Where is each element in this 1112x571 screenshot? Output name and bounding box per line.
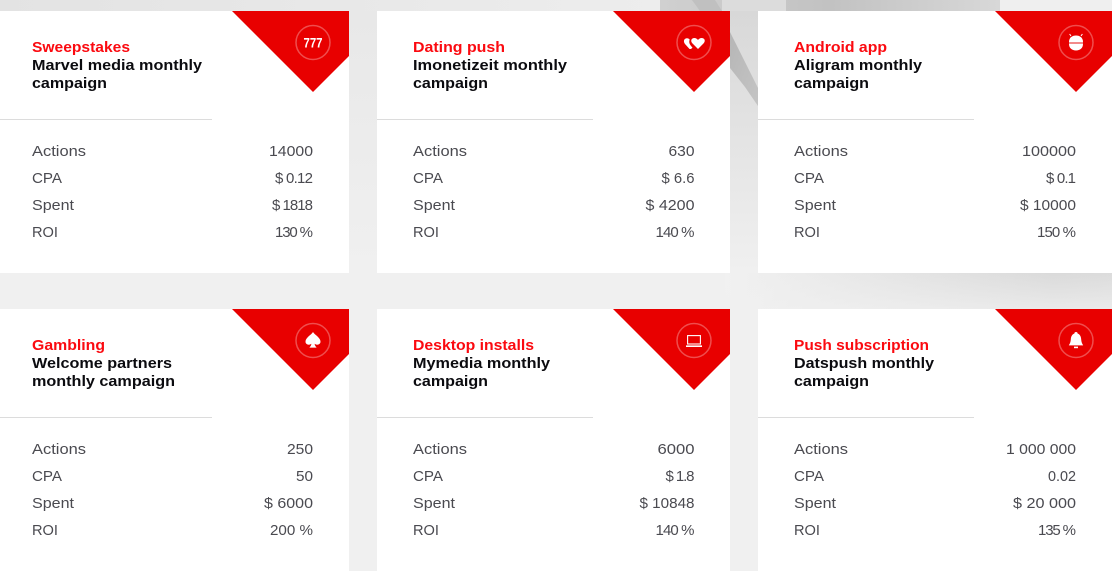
card: Push subscription <box>758 309 1112 571</box>
stats table: Spent <box>794 197 837 214</box>
stats table: $ 1818 <box>272 197 313 214</box>
stats table: ROI <box>32 522 58 539</box>
card: Dating push <box>377 11 730 273</box>
stats table: ROI <box>32 224 58 241</box>
heading: Sweepstakes <box>32 39 130 56</box>
stats table: Spent <box>32 495 75 512</box>
heading: Aligram monthly <box>794 57 923 74</box>
stats table: 250 <box>287 441 313 458</box>
heading: Android app <box>794 39 887 56</box>
heading: campaign <box>794 373 869 390</box>
stats table <box>794 143 1076 241</box>
stats table <box>413 441 694 539</box>
heading: Marvel media monthly <box>32 57 203 74</box>
stats table: CPA <box>413 170 443 187</box>
stats table: Actions <box>32 441 86 458</box>
stats table: Actions <box>413 441 467 458</box>
heading <box>32 39 203 92</box>
stats table <box>794 441 1076 539</box>
stats table: ROI <box>794 224 820 241</box>
heading: Dating push <box>413 39 505 56</box>
heading: Imonetizeit monthly <box>413 57 568 74</box>
stats table: Actions <box>413 143 467 160</box>
heading: campaign <box>32 75 107 92</box>
card: Android app <box>758 11 1112 273</box>
stats table: Actions <box>32 143 86 160</box>
stats table: $ 4200 <box>646 197 694 214</box>
stats table <box>413 143 694 241</box>
stats table: CPA <box>32 468 62 485</box>
heading <box>413 39 568 92</box>
stats table: 140 % <box>656 224 694 241</box>
heading <box>32 337 175 390</box>
heading: Datspush monthly <box>794 355 935 372</box>
corner ribbon with hearts icon <box>613 11 730 92</box>
stats table: Spent <box>794 495 837 512</box>
stats table: 14000 <box>269 143 313 160</box>
stats table: Spent <box>32 197 75 214</box>
heading: Push subscription <box>794 337 929 354</box>
stats table: 150 % <box>1037 224 1076 241</box>
stats table <box>32 143 313 241</box>
stats table <box>32 441 313 539</box>
heading: monthly campaign <box>32 373 175 390</box>
corner ribbon with bell icon <box>995 309 1112 390</box>
stats table: 135 % <box>1038 522 1076 539</box>
corner ribbon with 777 icon: 777 <box>304 34 323 50</box>
stats table: CPA <box>413 468 443 485</box>
stats table: Spent <box>413 197 456 214</box>
stats table: ROI <box>413 522 439 539</box>
heading: campaign <box>413 75 488 92</box>
card: Gambling <box>0 309 349 571</box>
stats table: CPA <box>794 170 824 187</box>
card: Desktop installs <box>377 309 730 571</box>
card: Sweepstakes <box>0 11 349 273</box>
stats table: $ 0.1 <box>1046 170 1076 187</box>
stats table: $ 6000 <box>264 495 313 512</box>
stats table: Spent <box>413 495 456 512</box>
stats table: ROI <box>794 522 820 539</box>
stats table: $ 20 000 <box>1013 495 1076 512</box>
heading: Gambling <box>32 337 105 354</box>
heading: campaign <box>413 373 488 390</box>
stats table: 6000 <box>658 441 694 458</box>
stats table: Actions <box>794 441 848 458</box>
stats table: 200 % <box>270 522 313 539</box>
stats table: 50 <box>296 468 313 485</box>
stats table: $ 0.12 <box>275 170 313 187</box>
stats table: 1 000 000 <box>1006 441 1076 458</box>
heading: Desktop installs <box>413 337 534 354</box>
heading <box>794 39 923 92</box>
stats table: $ 10000 <box>1020 197 1076 214</box>
heading: campaign <box>794 75 869 92</box>
corner ribbon with android icon <box>995 11 1112 92</box>
heading <box>794 337 935 390</box>
corner ribbon with spade icon <box>232 309 349 390</box>
stats table: $ 6.6 <box>662 170 694 187</box>
stats table: $ 10848 <box>640 495 694 512</box>
stats table: CPA <box>794 468 824 485</box>
stats table: 100000 <box>1022 143 1076 160</box>
stats table: 130 % <box>275 224 313 241</box>
stats table: 140 % <box>656 522 694 539</box>
heading: Mymedia monthly <box>413 355 551 372</box>
corner ribbon with 777 icon <box>232 11 349 92</box>
stats table: CPA <box>32 170 62 187</box>
stats table: Actions <box>794 143 848 160</box>
heading: Welcome partners <box>32 355 172 372</box>
heading <box>413 337 551 390</box>
stats table: 0.02 <box>1048 468 1076 485</box>
corner ribbon with laptop icon <box>613 309 730 390</box>
stats table: $ 1.8 <box>666 468 694 485</box>
stats table: ROI <box>413 224 439 241</box>
stats table: 630 <box>668 143 694 160</box>
